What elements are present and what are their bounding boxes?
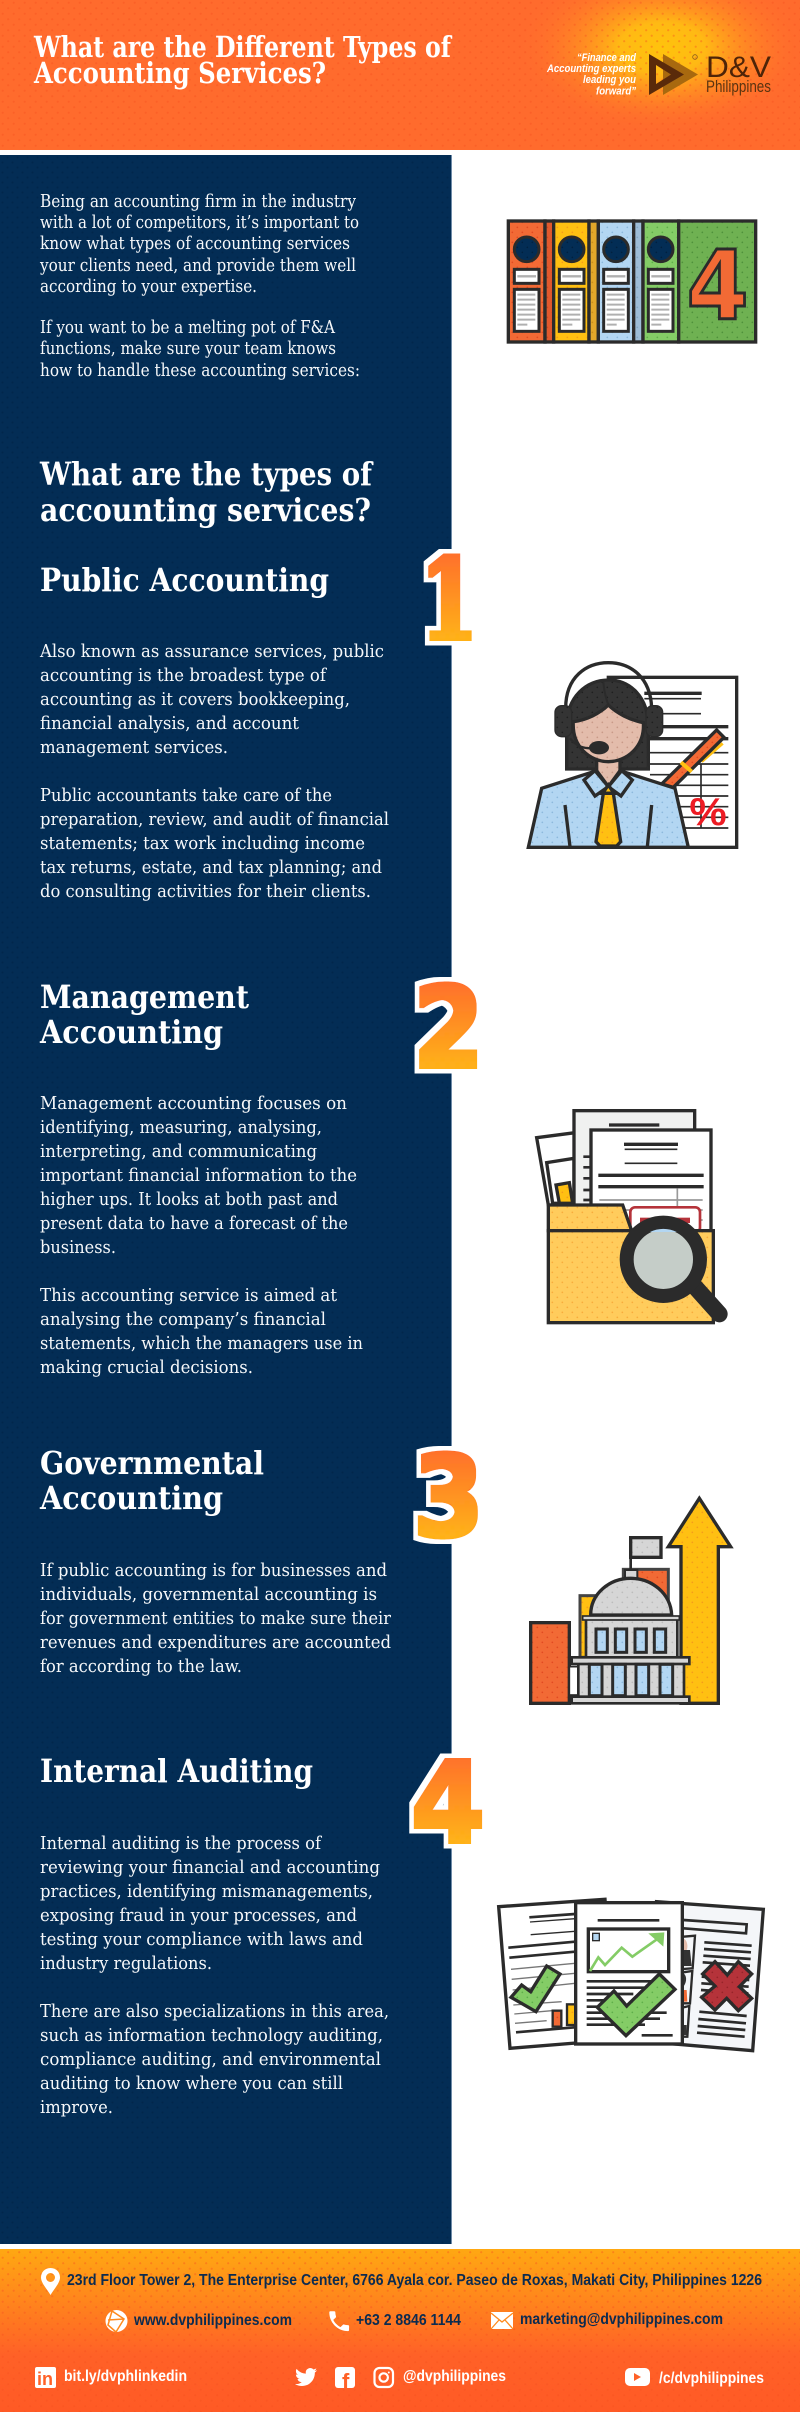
text block: internal auditing paragraph 1: practices, identifying mismanagements, — [40, 1881, 373, 1902]
text block: internal auditing paragraph 2: auditing to know where you can still — [40, 2073, 343, 2094]
logo: D&V Philippines: D&V — [706, 51, 771, 84]
text block: management accounting paragraph 1: identifying, measuring, analysing, — [40, 1117, 322, 1138]
text block: management accounting paragraph 1: important financial information to the — [40, 1165, 357, 1186]
text block: internal auditing paragraph 1: exposing fraud in your processes, and — [40, 1905, 357, 1926]
text block: management accounting paragraph 1: higher ups. It looks at both past and — [40, 1189, 338, 1210]
icon: accountant with headset and report: % — [689, 790, 727, 834]
text block: intro paragraph 1: your clients need, and provide them well — [39, 255, 356, 276]
text block: internal auditing paragraph 2: There are also specializations in this area, — [40, 2001, 389, 2022]
text block: public accounting paragraph 2: do consulting activities for their clients. — [40, 881, 371, 902]
text block: public accounting paragraph 1: accounting as it covers bookkeeping, — [40, 689, 350, 710]
heading: governmental accounting — [39, 1444, 264, 1517]
text block: internal auditing paragraph 1 — [40, 1833, 380, 1974]
icon: four binders — [508, 221, 756, 342]
tagline quote: forward” — [596, 86, 636, 98]
text block: management accounting paragraph 1: business. — [40, 1237, 116, 1258]
text block: internal auditing paragraph 2: improve. — [40, 2097, 113, 2118]
text block: public accounting paragraph 1: management services. — [40, 737, 228, 758]
title: Accounting Services? — [33, 56, 326, 90]
icon: government building with growth arrow — [531, 1498, 731, 1703]
number 4: 4 — [411, 1739, 485, 1869]
text block: management accounting paragraph 2: This accounting service is aimed at — [40, 1285, 338, 1306]
icon: youtube — [625, 2368, 650, 2386]
heading: management accounting: Accounting — [39, 1013, 223, 1051]
logo: D&V Philippines — [649, 51, 771, 96]
icon: facebook: f — [342, 2369, 350, 2394]
text block: public accounting paragraph 1: Also known as assurance services, public — [39, 641, 384, 662]
text block: management accounting paragraph 1: Management accounting focuses on — [40, 1093, 347, 1114]
text block: intro paragraph 1: know what types of accounting services — [40, 233, 350, 254]
tagline quote: leading you — [583, 74, 636, 86]
tagline quote: “Finance and — [577, 52, 636, 64]
text block: governmental accounting: If public accounting is for businesses and — [40, 1560, 387, 1581]
text block: management accounting paragraph 1: interpreting, and communicating — [40, 1141, 317, 1162]
text block: intro paragraph 2: how to handle these accounting services: — [40, 360, 360, 381]
heading: internal auditing: Internal Auditing — [40, 1752, 313, 1790]
logo: D&V Philippines: Philippines — [706, 77, 771, 96]
icon: audit documents with checks and cross — [499, 1899, 763, 2051]
icon: folder with papers and magnifier — [537, 1111, 719, 1323]
tagline quote: Accounting experts — [546, 63, 636, 75]
text block: management accounting paragraph 1: present data to have a forecast of the — [40, 1213, 348, 1234]
text block: governmental accounting: individuals, governmental accounting is — [40, 1584, 377, 1605]
tagline quote — [546, 52, 636, 98]
panel: header banner — [0, 0, 800, 150]
number 3: 3 — [413, 1433, 484, 1563]
text block: public accounting paragraph 2: Public accountants take care of the — [40, 785, 332, 806]
text block: internal auditing paragraph 2 — [40, 2001, 389, 2118]
icon: accountant with headset and report — [528, 663, 737, 847]
heading: management accounting — [39, 978, 249, 1051]
number 2: 2 — [413, 964, 484, 1094]
text block: internal auditing paragraph 1: testing your compliance with laws and — [40, 1929, 363, 1950]
text block: management accounting paragraph 2: statements, which the managers use in — [40, 1333, 363, 1354]
icon: linkedin: in — [37, 2369, 53, 2389]
text block: public accounting paragraph 2: preparation, review, and audit of financial — [40, 809, 389, 830]
text block: internal auditing paragraph 2: such as information technology auditing, — [40, 2025, 383, 2046]
icon: envelope — [491, 2312, 513, 2329]
heading: governmental accounting: Accounting — [39, 1479, 223, 1517]
text block: management accounting paragraph 2: making crucial decisions. — [40, 1357, 253, 1378]
phone number: +63 2 8846 1144 — [356, 2312, 461, 2329]
heading: what are the types: accounting services? — [40, 491, 371, 529]
text block: internal auditing paragraph 1: reviewing your financial and accounting — [40, 1857, 380, 1878]
text block: intro paragraph 2: If you want to be a melting pot of F&A — [40, 317, 336, 338]
icon: facebook — [335, 2367, 355, 2394]
panel: navy content column — [0, 155, 452, 2244]
icon: phone — [329, 2311, 349, 2331]
text block: internal auditing paragraph 1: industry regulations. — [40, 1953, 212, 1974]
text block: intro paragraph 2 — [40, 317, 360, 381]
text block: internal auditing paragraph 2: compliance auditing, and environmental — [40, 2049, 381, 2070]
text block: public accounting paragraph 2 — [40, 785, 389, 902]
text block: intro paragraph 1: according to your expertise. — [40, 276, 257, 297]
youtube channel: /c/dvphilippines — [659, 2370, 764, 2387]
text block: intro paragraph 1: with a lot of competitors, it’s important to — [40, 212, 359, 233]
text block: management accounting paragraph 2: analysing the company’s financial — [40, 1309, 326, 1330]
text block: intro paragraph 1 — [39, 191, 359, 297]
text block: public accounting paragraph 1: accounting is the broadest type of — [40, 665, 327, 686]
title — [33, 30, 453, 90]
text block: public accounting paragraph 1 — [39, 641, 384, 758]
text block: governmental accounting — [40, 1560, 391, 1677]
instagram and twitter handle: @dvphilippines — [403, 2368, 506, 2385]
icon: twitter — [295, 2368, 317, 2386]
icon: location pin — [41, 2268, 60, 2295]
heading: what are the types: What are the types of — [39, 455, 374, 493]
website: www.dvphilippines.com — [133, 2312, 292, 2329]
text block: public accounting paragraph 1: financial analysis, and account — [40, 713, 300, 734]
panel: footer contact band — [0, 2249, 800, 2412]
heading: governmental accounting: Governmental — [40, 1444, 264, 1482]
text block: governmental accounting: for according to the law. — [40, 1656, 242, 1677]
icon: globe — [106, 2310, 128, 2332]
icon: instagram — [374, 2368, 393, 2387]
title: What are the Different Types of — [33, 30, 453, 64]
email: marketing@dvphilippines.com — [520, 2311, 723, 2328]
text block: internal auditing paragraph 1: Internal auditing is the process of — [40, 1833, 322, 1854]
heading: management accounting: Management — [40, 978, 249, 1016]
text block: management accounting paragraph 1 — [40, 1093, 357, 1258]
linkedin link: bit.ly/dvphlinkedin — [64, 2368, 187, 2385]
heading: what are the types — [39, 455, 374, 529]
icon: linkedin — [35, 2367, 56, 2389]
number 1: 1 — [420, 535, 478, 666]
text block: governmental accounting: revenues and expenditures are accounted — [40, 1632, 391, 1653]
text block: public accounting paragraph 2: tax returns, estate, and tax planning; and — [40, 857, 382, 878]
heading: public accounting: Public Accounting — [40, 561, 329, 599]
text block: intro paragraph 2: functions, make sure your team knows — [40, 338, 336, 359]
text block: public accounting paragraph 2: statements; tax work including income — [40, 833, 365, 854]
text block: intro paragraph 1: Being an accounting firm in the industry — [40, 191, 357, 212]
icon: four binders: 4 — [687, 232, 749, 342]
text block: management accounting paragraph 2 — [40, 1285, 363, 1378]
text block: governmental accounting: for government entities to make sure their — [40, 1608, 391, 1629]
